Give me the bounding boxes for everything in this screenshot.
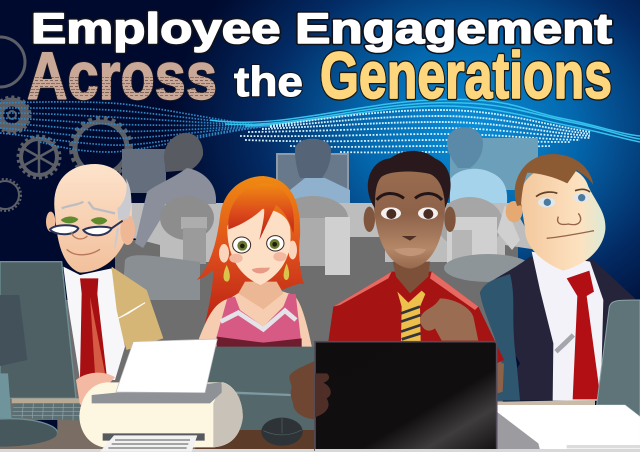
title bbox=[27, 5, 612, 114]
neck bbox=[393, 262, 430, 293]
laptop bbox=[315, 342, 497, 450]
glasses bbox=[50, 221, 123, 235]
title word: Across: Across bbox=[27, 39, 217, 114]
jacket bbox=[480, 257, 635, 401]
nose and mouth bbox=[547, 213, 594, 238]
keyboard bbox=[12, 403, 82, 421]
fringe bbox=[228, 183, 294, 240]
hair back bbox=[197, 176, 304, 332]
panel: right half foreground bbox=[315, 151, 640, 452]
gear: large ring top left bbox=[0, 37, 25, 87]
cheeks and mouth bbox=[229, 252, 287, 273]
ear bbox=[506, 201, 522, 222]
neck bbox=[238, 282, 283, 309]
paper bbox=[116, 339, 217, 393]
ears bbox=[219, 241, 297, 263]
gear: small ring lower bbox=[0, 179, 21, 211]
nose and mouth bbox=[402, 236, 417, 241]
desk bbox=[0, 398, 320, 452]
title line: Employee Engagement: Employee Engagement bbox=[31, 5, 612, 53]
silhouette: right worker bbox=[437, 127, 538, 282]
face bbox=[373, 168, 445, 269]
old man bbox=[46, 164, 163, 380]
face bbox=[227, 209, 291, 285]
monitor left bbox=[0, 262, 76, 448]
head bbox=[54, 164, 132, 273]
ears and grey hair bbox=[46, 178, 135, 247]
girl bbox=[197, 176, 312, 347]
panel: left half foreground bbox=[0, 164, 320, 452]
monitor centre bbox=[207, 347, 315, 430]
earrings bbox=[224, 263, 289, 282]
monitor right bbox=[597, 300, 640, 417]
hair bbox=[515, 154, 593, 206]
red tie bbox=[80, 278, 107, 377]
hand holding laptop bbox=[289, 360, 317, 419]
head bbox=[520, 166, 605, 271]
silhouette: left worker bbox=[122, 133, 216, 300]
shoulders bbox=[199, 290, 312, 347]
gear: ring centre bbox=[71, 118, 131, 178]
pink top bbox=[217, 294, 302, 347]
red tie bbox=[567, 271, 601, 399]
output tray bbox=[103, 433, 205, 441]
title line: Employee Engagement: Employee Engagement bbox=[31, 5, 612, 53]
eyes and brows bbox=[61, 202, 115, 225]
red shirt bbox=[328, 272, 504, 363]
pointing hand bbox=[420, 298, 478, 341]
paper stack bbox=[497, 400, 640, 450]
suit jacket bbox=[112, 267, 163, 350]
dark man bbox=[328, 151, 504, 393]
brows and eyes bbox=[377, 194, 442, 219]
fingers on laptop bbox=[315, 373, 331, 417]
silhouette: centre worker bbox=[277, 139, 385, 280]
nose and mouth bbox=[67, 232, 100, 255]
gears bbox=[0, 37, 131, 211]
title word: the: the bbox=[234, 58, 303, 105]
mouse bbox=[261, 418, 303, 446]
ears bbox=[364, 207, 456, 232]
wave of dotted light lines bbox=[0, 99, 640, 152]
eyes bbox=[233, 236, 284, 253]
title word: the: the bbox=[234, 58, 303, 105]
white shirt bbox=[532, 252, 603, 401]
gear: solid small bbox=[0, 97, 30, 133]
title word: Across: Across bbox=[27, 39, 217, 114]
light desk band bbox=[122, 203, 538, 262]
gear: spoked bbox=[18, 136, 60, 178]
striped tie bbox=[397, 291, 425, 342]
man in suit bbox=[480, 154, 635, 401]
eyes bbox=[536, 189, 590, 207]
bottom edge bbox=[315, 449, 640, 452]
hair bbox=[368, 151, 451, 208]
old man hand bbox=[76, 373, 115, 405]
printer bbox=[79, 339, 243, 452]
white shirt bbox=[63, 267, 125, 380]
back wall lower grey bbox=[0, 240, 518, 420]
forearm bbox=[497, 363, 504, 393]
background office silhouettes bbox=[0, 127, 538, 420]
